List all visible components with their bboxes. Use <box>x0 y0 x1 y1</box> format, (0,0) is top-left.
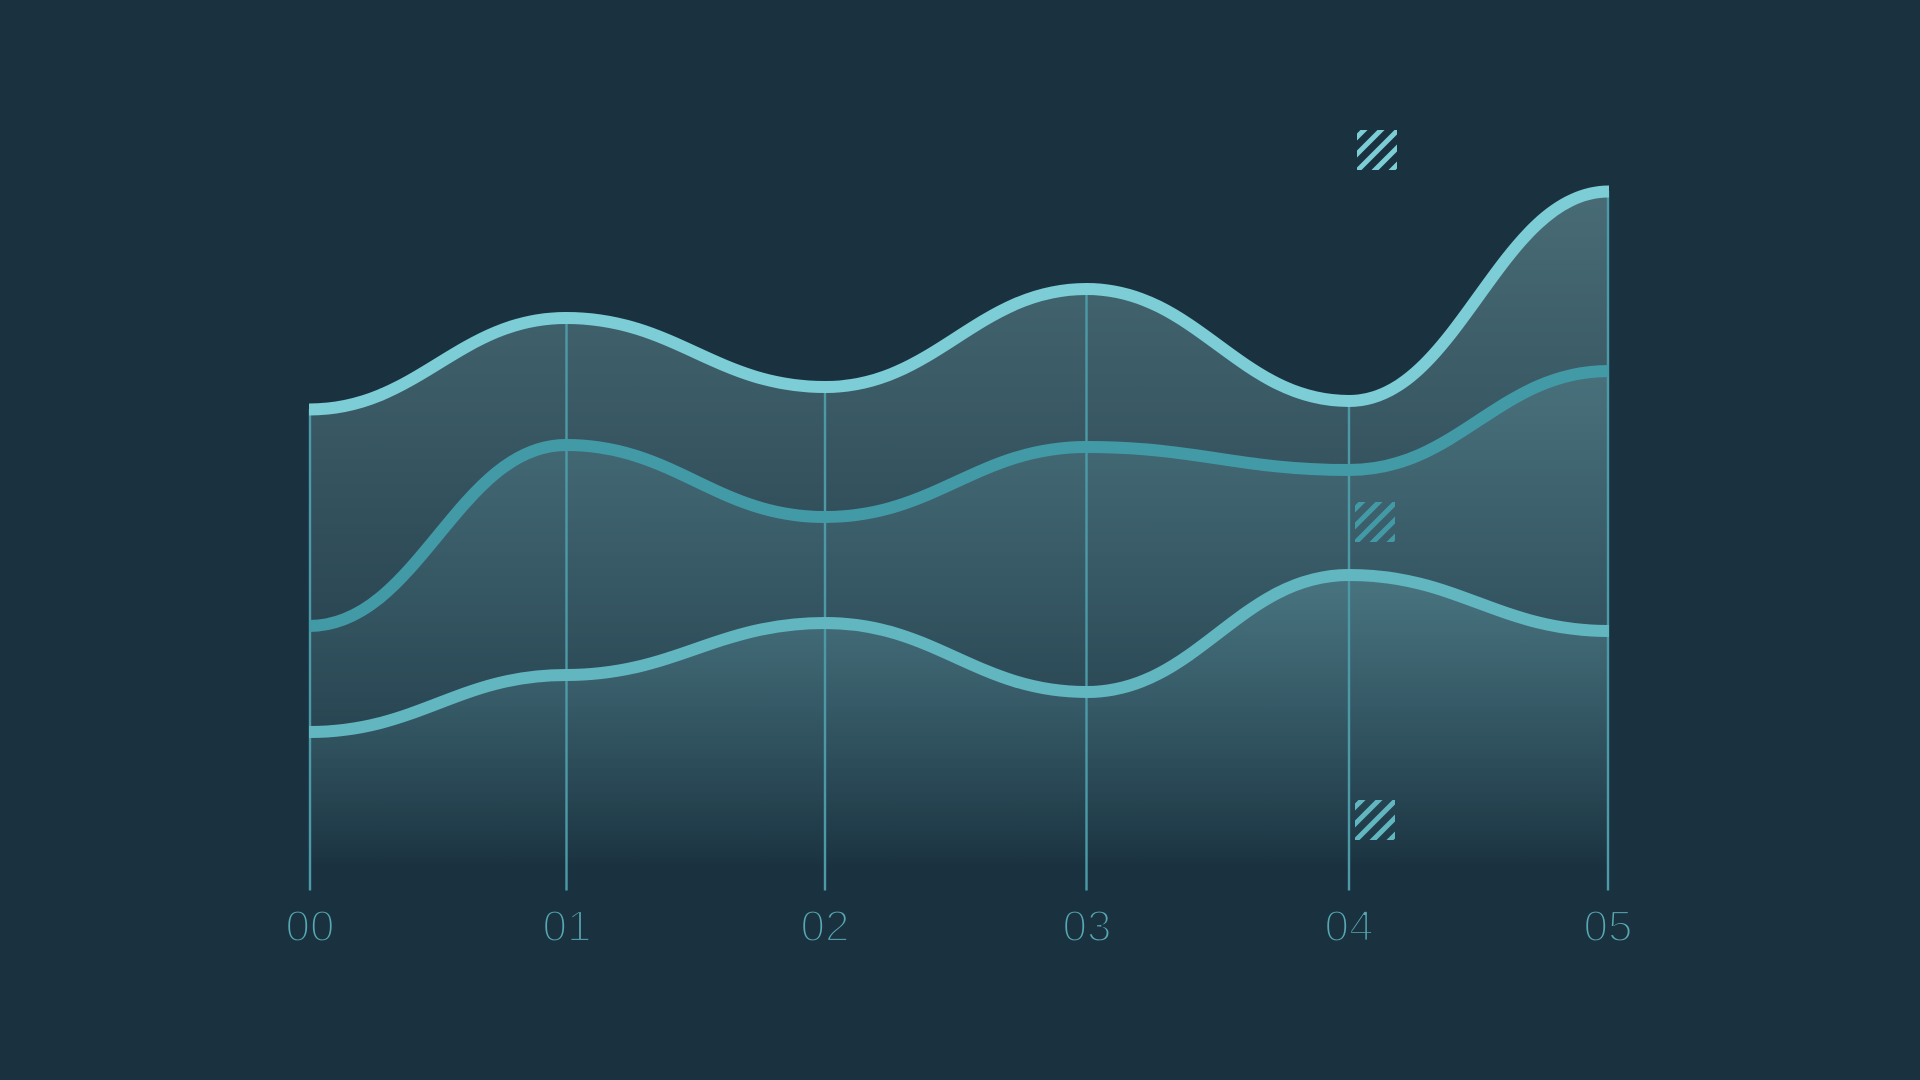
icon: hatch marker bottom series <box>1355 800 1395 840</box>
line: middle series <box>309 371 1609 626</box>
vertical gridlines <box>310 191 1608 890</box>
axis labels: 00 <box>286 902 334 951</box>
area: middle series fill <box>310 371 1608 890</box>
area: top series fill <box>310 192 1608 890</box>
axis labels: 04 <box>1325 902 1373 951</box>
line: bottom series <box>309 575 1609 732</box>
line: top series <box>309 192 1609 410</box>
layered area chart <box>288 130 1630 940</box>
area: bottom series fill <box>310 575 1608 890</box>
icon: hatch marker middle series <box>1355 502 1395 542</box>
axis labels: 02 <box>801 902 849 951</box>
axis labels <box>286 902 1632 951</box>
axis labels: 03 <box>1063 902 1111 951</box>
icon: hatch marker top series <box>1357 130 1397 170</box>
axis labels: 01 <box>543 902 591 951</box>
axis labels: 05 <box>1584 902 1632 951</box>
